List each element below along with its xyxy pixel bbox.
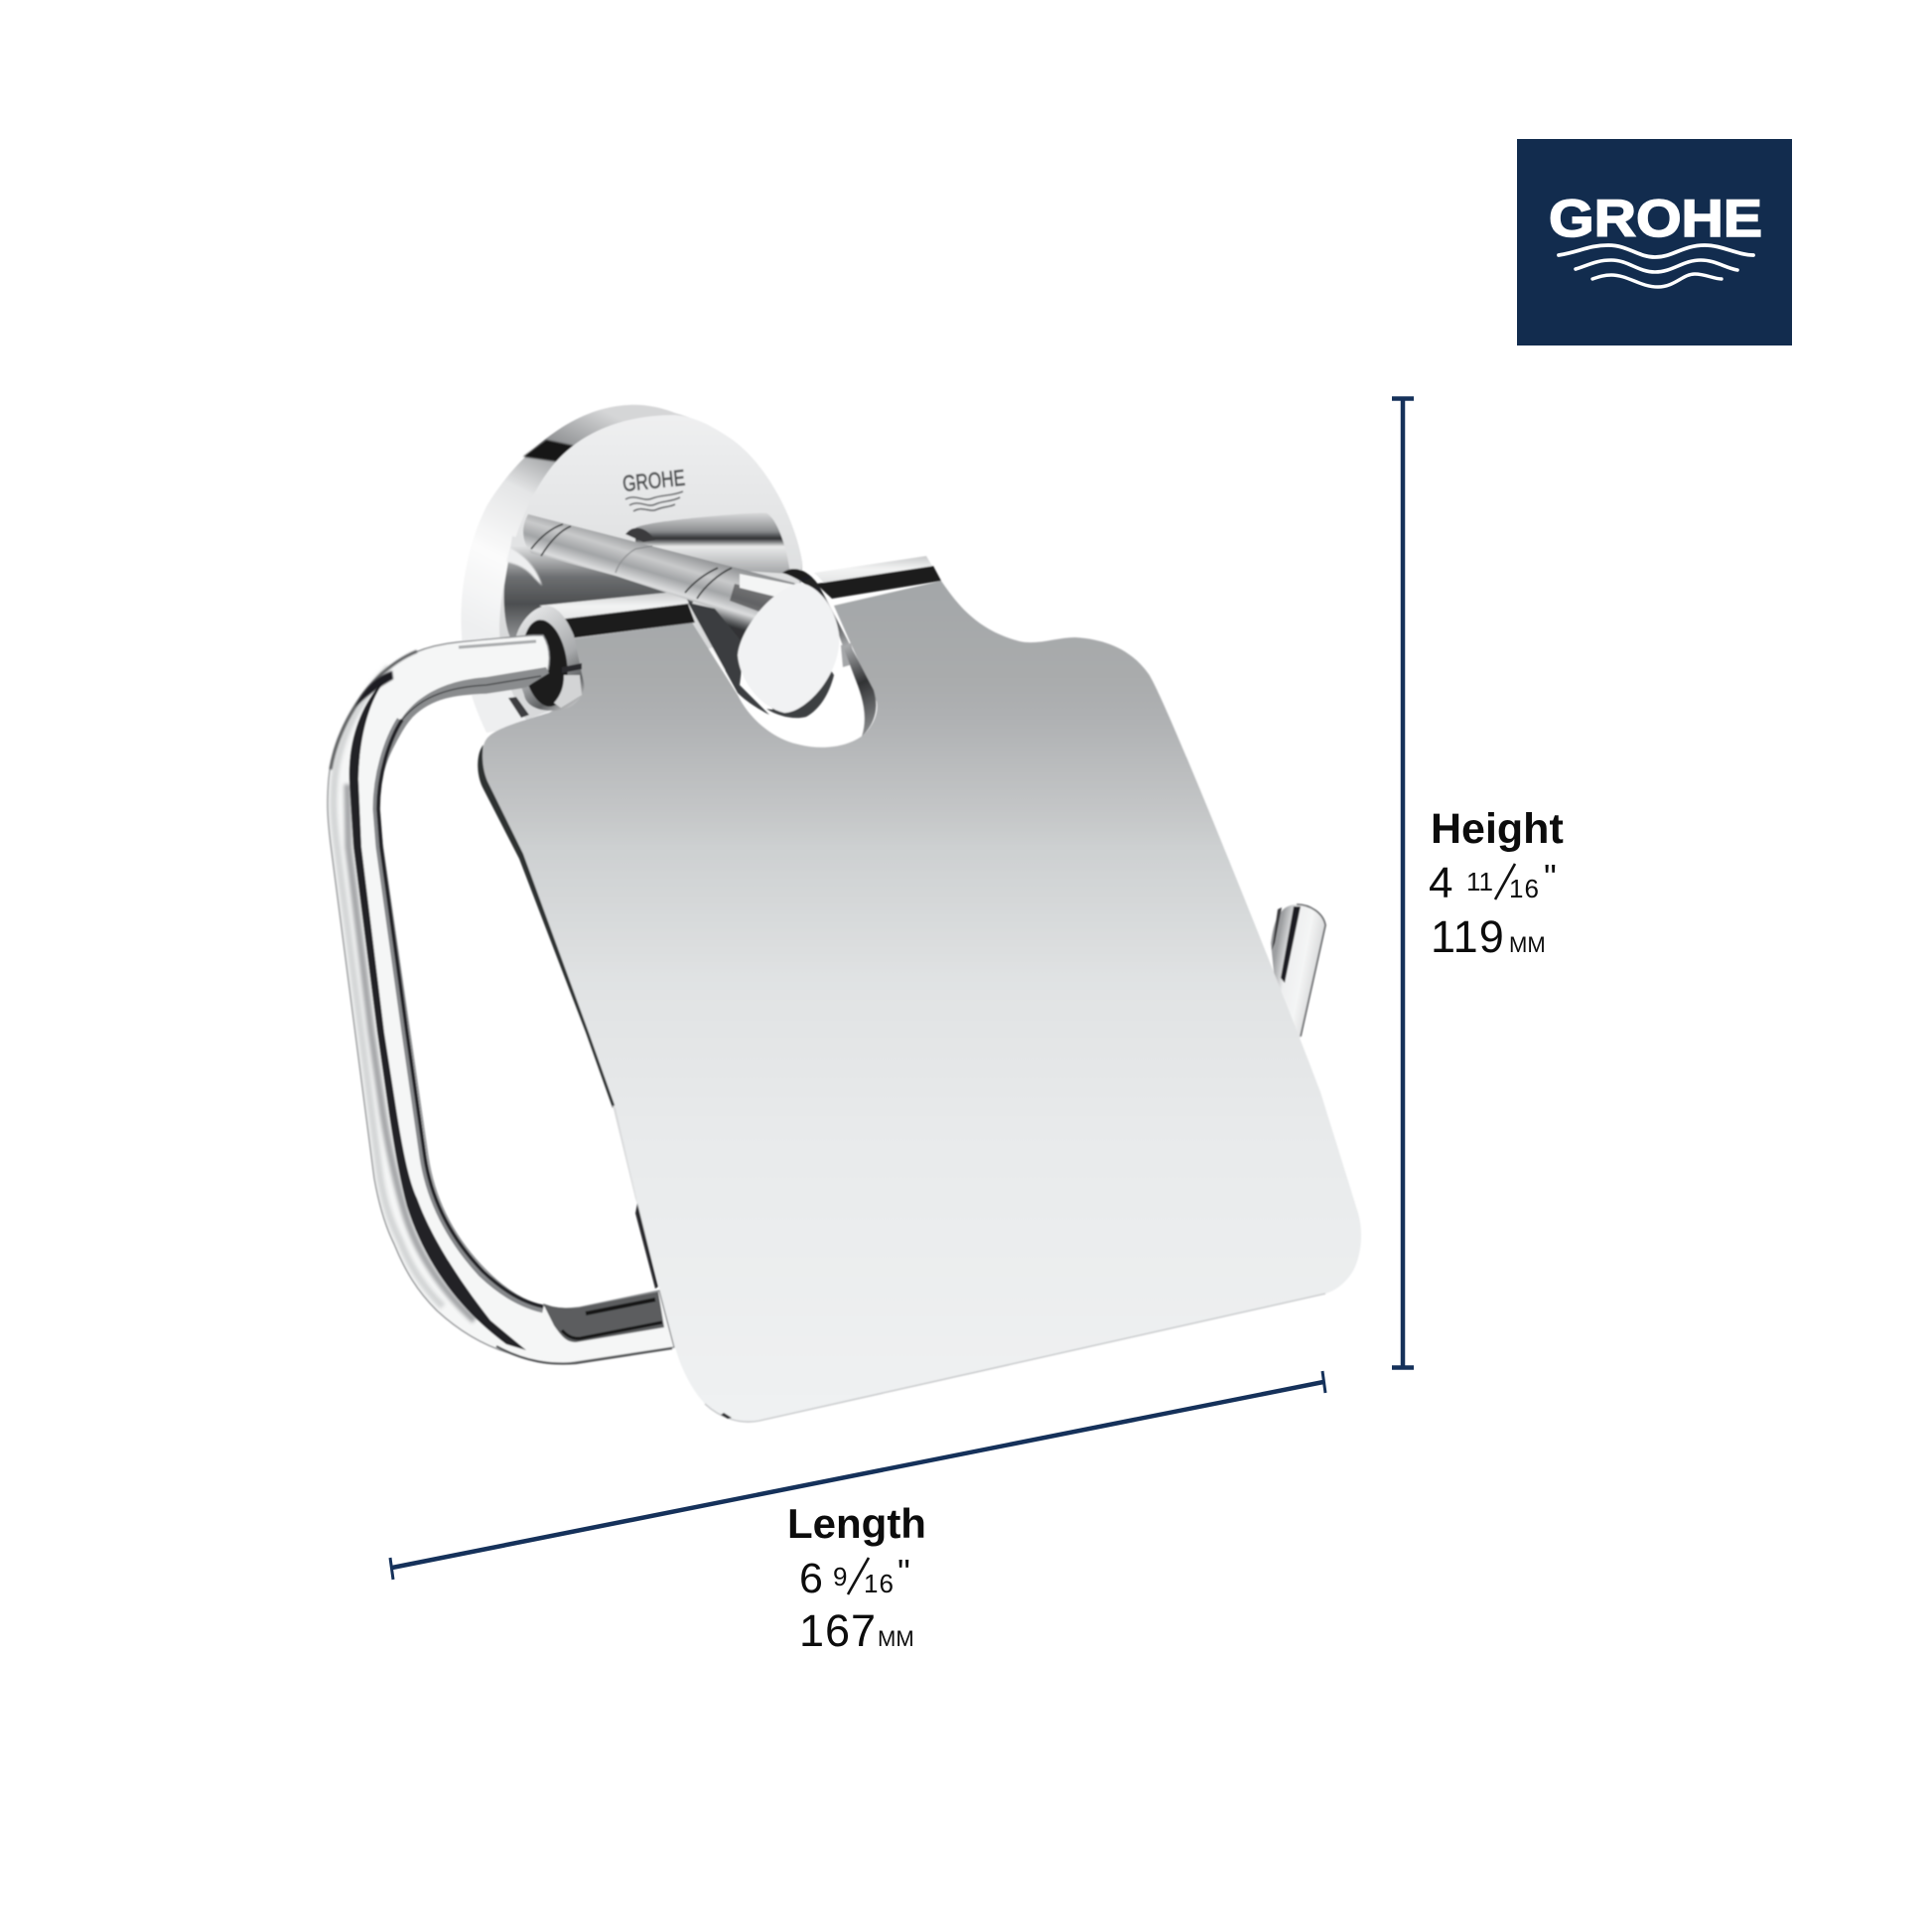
lower dark band (543, 1292, 664, 1342)
cover top strip right (814, 556, 941, 599)
crescent under cap (766, 667, 834, 718)
length label: 6 (799, 1555, 823, 1602)
cover dark left edge (478, 745, 615, 1108)
height label: Height (1431, 805, 1564, 853)
length label: 16 (864, 1569, 895, 1598)
length dimension line (390, 1371, 1325, 1580)
hook behind cover (1271, 904, 1325, 1037)
shoulder dark blob (355, 671, 393, 707)
height label (1429, 805, 1564, 962)
cover plate (478, 556, 1361, 1422)
paper bar loop (328, 635, 674, 1364)
GROHE logo: GROHE (1549, 190, 1762, 248)
top pipe highlight band (459, 641, 536, 647)
height dimension line (1392, 397, 1414, 1369)
rod end cap (738, 583, 839, 713)
length label: 167 (799, 1605, 877, 1656)
height label: " (1544, 857, 1557, 897)
plate logo: GROHE (621, 466, 686, 496)
rod grooves (531, 524, 732, 599)
length label: Length (787, 1500, 926, 1547)
band next to stripe (347, 784, 475, 1320)
height label: MM (1509, 932, 1546, 957)
inner tube reflections (384, 667, 549, 769)
plate logo (621, 466, 686, 511)
inner dark stripe (376, 720, 543, 1310)
length label (787, 1500, 926, 1656)
product: toilet paper holder (328, 405, 1361, 1422)
ring around tube (514, 606, 584, 711)
outer dark stripe (349, 670, 526, 1350)
length label: " (897, 1552, 910, 1592)
cover top strip left (539, 592, 695, 639)
height label: 119 (1431, 911, 1505, 962)
length label: 9 (833, 1562, 847, 1591)
shoulder dark edge (331, 651, 417, 769)
bottom rim line (496, 1346, 672, 1364)
height label: 16 (1509, 874, 1540, 903)
outer gray band (334, 667, 443, 1307)
length label: MM (878, 1626, 914, 1651)
GROHE logo (1517, 139, 1792, 345)
height label: 4 (1429, 859, 1452, 907)
height label: 11 (1466, 867, 1493, 897)
wall plate (461, 405, 802, 733)
rod through cover (523, 514, 876, 737)
